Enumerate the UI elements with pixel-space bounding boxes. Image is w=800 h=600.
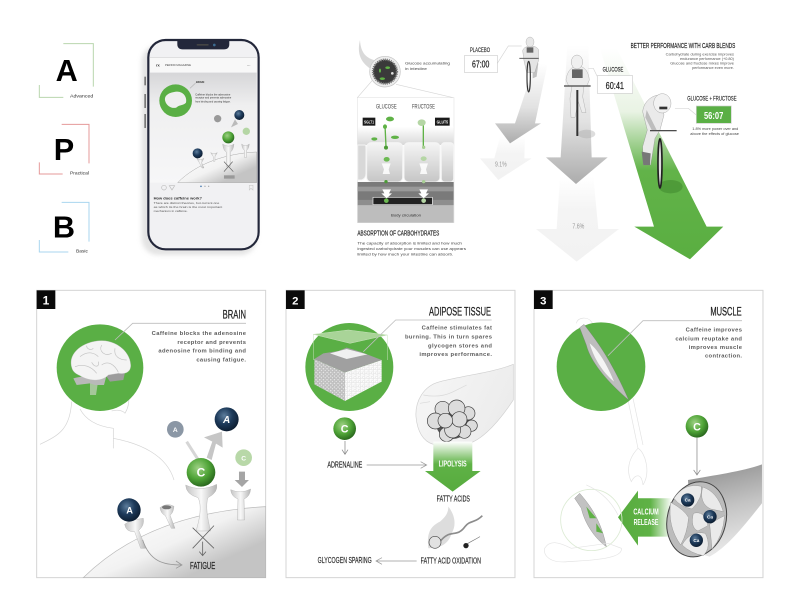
note: extra power [690, 127, 739, 136]
phone app header: PERIOD MAGAZINE [165, 63, 191, 67]
phone post image: BRAIN [196, 80, 204, 84]
label: fatty acid oxidation: FATTY ACID OXIDATION [421, 557, 481, 566]
level A advanced: A [56, 54, 78, 88]
level B basic: Basic [76, 248, 89, 253]
number badge [534, 290, 553, 309]
level P practical: P [54, 133, 74, 167]
muscle bundle [659, 464, 762, 563]
molecule: adenosine faded: A [173, 427, 178, 434]
label: placebo: 67:00 [472, 60, 490, 71]
molecule: calcium one [681, 493, 694, 507]
arrow: caffeine binding [235, 472, 249, 487]
intestine icon [357, 40, 453, 98]
arrow: adrenaline to lipolysis [367, 462, 427, 468]
heading: better performance: BETTER PERFORMANCE WITH CARB BLENDS [631, 43, 736, 50]
molecule: adenosine displaced [215, 407, 239, 431]
arrow: to fatigue [143, 540, 182, 568]
heading: BRAIN [223, 307, 246, 321]
molecule: caffeine [187, 458, 215, 487]
pointer line [608, 321, 742, 356]
arrow: blocked entry [187, 442, 198, 460]
phone caption [154, 185, 253, 213]
label: glucose: GLUCOSE [603, 66, 624, 73]
absorption diagram: Body circulation [391, 214, 421, 218]
molecule: caffeine [333, 417, 356, 440]
molecule: adenosine displaced: A [222, 415, 230, 426]
text: carb blends: Glucose and fructose mixes improve [670, 61, 734, 65]
label: glucose plus fructose: GLUCOSE + FRUCTOSE [687, 95, 737, 102]
intestine caption: Glucose accumulating [405, 62, 450, 66]
level A advanced: Advanced [70, 94, 94, 99]
description: receptor and prevents [177, 340, 246, 346]
description: adenosine from binding and [158, 349, 246, 355]
description: calcium reuptake and [675, 336, 742, 342]
molecule: caffeine: C [693, 421, 701, 433]
heading: ADIPOSE TISSUE [429, 305, 491, 319]
description: Caffeine stimulates fat [422, 326, 492, 332]
fat cells cluster [427, 400, 477, 442]
absorption text: The capacity of absorption is limited and how much [357, 240, 462, 245]
phone post image: receptor and prevents adenosine [195, 97, 232, 100]
description: causing fatigue. [196, 358, 246, 364]
pointer line [363, 320, 492, 352]
label: glucose [588, 66, 633, 93]
text: carb blends [666, 53, 734, 70]
phone post image: Caffeine blocks the adenosine [195, 93, 231, 96]
note: extra power: above the effects of glucose [690, 132, 739, 136]
level P practical: Practical [70, 170, 89, 175]
arrow: glucose plus fructose [600, 48, 723, 259]
absorption text [357, 240, 466, 257]
adipose circle [305, 323, 393, 411]
absorption diagram: FRUCTOSE [412, 104, 435, 111]
arrow: caffeine to adrenaline [342, 441, 348, 454]
text: carb blends: endurance performance (+0.80) [680, 57, 734, 61]
panel: absorption of carbohydrates [357, 40, 466, 257]
phone caption: How does caffeine work? [154, 195, 203, 200]
molecule: adenosine bound [117, 498, 141, 522]
cell membrane [83, 507, 266, 578]
fat tissue tube [416, 364, 513, 444]
molecule: caffeine [686, 415, 708, 438]
label: glucose plus fructose: 56:07 [704, 111, 724, 122]
molecule: caffeine: C [341, 424, 349, 436]
text: carb blends: Carbohydrate during exercise improves [666, 53, 734, 57]
value: 7.6 percent: 7.6% [572, 222, 584, 231]
absorption heading: ABSORPTION OF CARBOHYDRATES [357, 228, 439, 237]
number badge [286, 290, 305, 309]
description: burning. This in turn spares [405, 335, 492, 341]
brain illustration [71, 341, 131, 395]
description [675, 328, 743, 360]
panel: level legend [39, 44, 94, 253]
cyclist: glucose [564, 55, 595, 138]
arrow: oxidation to glycogen sparing [376, 558, 417, 564]
arrow: calcium release: CALCIUM [633, 507, 659, 516]
note: extra power: 1.8% more power over and [692, 127, 738, 131]
arrow: glucose [546, 45, 608, 184]
arrow: glucose savings [536, 177, 619, 262]
absorption text: limited by how much your intestine can absorb. [357, 252, 453, 257]
absorption diagram: SGLT1 [364, 119, 374, 124]
level P practical [39, 124, 89, 175]
molecule: adenosine faded [167, 421, 184, 438]
blocked signal cross [193, 526, 214, 556]
description: Caffeine blocks the adenosine [152, 331, 247, 337]
panel 1: brain [37, 290, 266, 578]
heading: MUSCLE [710, 305, 742, 319]
panel 2: adipose tissue [286, 290, 515, 578]
cyclist: placebo [519, 37, 539, 92]
phone app header [150, 57, 257, 72]
brain circle [57, 324, 143, 411]
description: Caffeine improves [686, 328, 742, 334]
molecule: calcium two: Ca [707, 514, 713, 519]
molecule: adenosine bound: A [126, 505, 133, 515]
arrow: placebo savings [480, 137, 532, 180]
label: glucose: 60:41 [606, 81, 624, 92]
label: glycogen sparing: GLYCOGEN SPARING [318, 556, 372, 565]
level B basic [39, 202, 89, 253]
molecule: calcium three [690, 534, 703, 547]
arrow: lipolysis [425, 442, 481, 492]
fat tissue cube [313, 330, 387, 401]
phone post image [150, 73, 257, 183]
phone caption: There are distinct theories, but current one [154, 201, 220, 205]
arrow: calcium release: RELEASE [634, 518, 659, 527]
arrow: placebo [495, 63, 547, 143]
level A advanced [39, 44, 94, 99]
number badge: 1 [43, 293, 50, 307]
label: adrenaline: ADRENALINE [327, 460, 362, 469]
value: 9.1 percent: 9.1% [495, 160, 507, 169]
arrow: lipolysis: LIPOLYSIS [439, 459, 467, 468]
absorption text: ingested carbohydrate your muscles can use appears [357, 246, 466, 251]
head outline [40, 385, 174, 480]
level B basic: B [53, 210, 75, 244]
cyclist: glucose plus fructose [642, 94, 683, 193]
pointer line [115, 323, 246, 340]
intestine caption line two: in intestine [405, 67, 427, 71]
label: placebo: PLACEBO [470, 47, 490, 54]
text: carb blends: performance even more. [692, 66, 734, 70]
arrow: displaced adenosine [204, 432, 223, 460]
arrow: calcium release [618, 491, 672, 546]
phone caption: mechanism in caffeine. [154, 209, 188, 213]
arrow: caffeine to muscle bundle [694, 438, 700, 475]
arm outline upper [576, 318, 647, 485]
description [405, 326, 492, 358]
description: glycogen stores and [428, 343, 492, 349]
phone app header: ... [247, 62, 251, 67]
molecule: calcium three: Ca [693, 538, 700, 543]
phone app header: rx [156, 62, 161, 67]
panel: cycling performance [465, 37, 739, 262]
label: fatty acids: FATTY ACIDS [437, 495, 470, 504]
number badge: 2 [292, 295, 298, 307]
description: improves muscle [689, 345, 743, 351]
absorption diagram: GLUCOSE [376, 104, 397, 111]
contracted muscle illustration [544, 485, 622, 562]
label: placebo [465, 46, 522, 73]
phone caption: as which its the brain is the most important [154, 205, 223, 209]
label: fatigue: FATIGUE [190, 561, 216, 572]
molecule: caffeine faded [235, 449, 252, 466]
number badge [37, 290, 55, 309]
absorption diagram [357, 98, 454, 223]
receptors [125, 484, 251, 548]
molecule: caffeine: C [197, 466, 206, 480]
description [152, 331, 247, 364]
panel 3: muscle [534, 290, 763, 578]
muscle spindle [580, 324, 629, 400]
label: glucose plus fructose [675, 95, 737, 123]
fatty acid flame illustration [428, 507, 482, 548]
molecule: calcium two [703, 510, 717, 523]
number badge: 3 [540, 295, 546, 307]
phone post image: from binding and causing fatigue. [195, 100, 231, 103]
empty receptor openings [162, 505, 171, 509]
molecule: caffeine faded: C [241, 455, 246, 462]
phone mockup [142, 40, 259, 255]
description: improves performance. [419, 352, 492, 358]
molecule: calcium one: Ca [685, 498, 691, 503]
absorption diagram: GLUT5 [437, 119, 448, 124]
muscle circle [557, 322, 645, 411]
description: contraction. [705, 354, 742, 360]
